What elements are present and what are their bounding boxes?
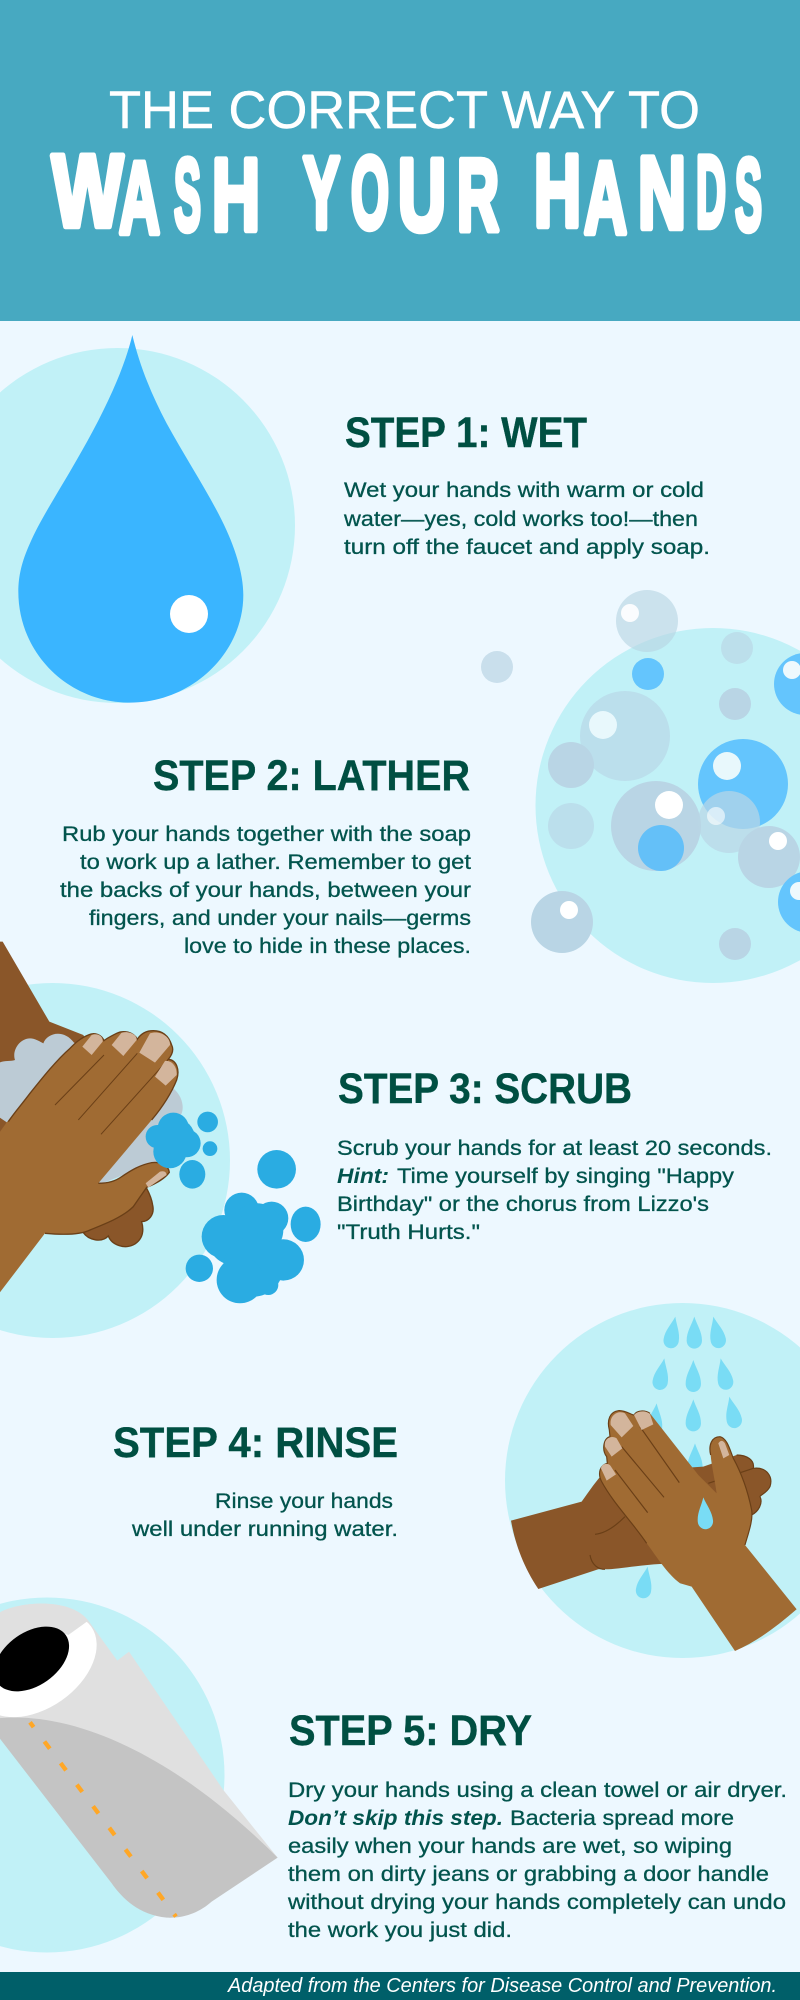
step 3 body: Scrub your hands for at least 20 seconds. bbox=[337, 1136, 772, 1160]
step 3 text bbox=[337, 1066, 772, 1244]
title line 2: A bbox=[584, 141, 627, 255]
title line 2: D bbox=[696, 135, 726, 249]
step 2 body: the backs of your hands, between your bbox=[60, 878, 471, 902]
foam bbox=[0, 1034, 183, 1185]
step 2 body: love to hide in these places. bbox=[184, 934, 471, 958]
step 5 body: without drying your hands completely can undo bbox=[287, 1890, 786, 1914]
back hand bbox=[511, 1455, 771, 1589]
step 4 body: well under running water. bbox=[131, 1517, 398, 1541]
footer credit bar: Adapted from the Centers for Disease Control and Prevention. bbox=[227, 1975, 777, 1997]
step 3 body: Hint: bbox=[337, 1164, 389, 1188]
towel sheet bbox=[0, 1718, 278, 1918]
step 3 heading: STEP 3: SCRUB bbox=[338, 1066, 632, 1113]
back arm bbox=[0, 942, 110, 1160]
step 4 body: Rinse your hands bbox=[215, 1489, 393, 1513]
title line 2: N bbox=[638, 136, 686, 250]
title line 2: R bbox=[457, 138, 499, 252]
title line 2: H bbox=[212, 138, 260, 252]
falling water drops bbox=[635, 1315, 743, 1599]
step 1 body bbox=[343, 478, 710, 559]
header banner bbox=[0, 0, 800, 321]
step 4 body bbox=[131, 1489, 398, 1541]
step 2 body: Rub your hands together with the soap bbox=[62, 822, 471, 846]
step 5 body: Bacteria spread more bbox=[510, 1806, 734, 1830]
step 3 body: Birthday" or the chorus from Lizzo's bbox=[337, 1192, 709, 1216]
step 2 body: to work up a lather. Remember to get bbox=[80, 850, 471, 874]
step 5 body: Don’t skip this step. bbox=[288, 1806, 503, 1830]
step 5 text bbox=[287, 1708, 787, 1942]
illustration: soap bubbles bbox=[481, 590, 800, 983]
back fingers bbox=[83, 1188, 153, 1247]
step 1 heading: STEP 1: WET bbox=[345, 410, 587, 457]
illustration: water drop bbox=[0, 335, 295, 703]
step 1 body: turn off the faucet and apply soap. bbox=[344, 535, 710, 559]
step 4 heading: STEP 4: RINSE bbox=[113, 1420, 398, 1467]
light paper bbox=[0, 1604, 278, 1858]
drop on hand bbox=[696, 1497, 714, 1530]
step 3 body: Time yourself by singing "Happy bbox=[397, 1164, 734, 1188]
title line 2: W bbox=[52, 134, 124, 248]
title line 2: H bbox=[534, 134, 581, 248]
step 3 body bbox=[337, 1136, 772, 1244]
illustration: paper towel roll bbox=[0, 1591, 278, 1952]
step 1 text bbox=[343, 410, 710, 559]
soap splats bbox=[146, 1112, 321, 1303]
title line 1: THE CORRECT WAY TO bbox=[109, 81, 700, 140]
front hand bbox=[0, 1031, 178, 1297]
title line 2: Y bbox=[303, 136, 340, 250]
step 2 heading: STEP 2: LATHER bbox=[153, 753, 470, 800]
step 5 body: easily when your hands are wet, so wiping bbox=[288, 1834, 732, 1858]
front hand bbox=[600, 1411, 797, 1651]
step 5 body bbox=[287, 1778, 787, 1942]
title line 2: S bbox=[174, 138, 201, 252]
step 5 body: them on dirty jeans or grabbing a door handle bbox=[288, 1862, 769, 1886]
step 5 heading: STEP 5: DRY bbox=[289, 1708, 532, 1755]
step 5 body: the work you just did. bbox=[288, 1918, 512, 1942]
step 3 body: "Truth Hurts." bbox=[337, 1220, 480, 1244]
footer credit bar bbox=[0, 1972, 800, 2000]
step 2 text bbox=[60, 753, 471, 958]
step 1 body: Wet your hands with warm or cold bbox=[344, 478, 704, 502]
illustration: scrubbing hands bbox=[0, 942, 321, 1338]
roll end bbox=[0, 1591, 116, 1739]
step 2 body bbox=[60, 822, 471, 958]
title line 2: O bbox=[351, 136, 389, 250]
title line 2: U bbox=[398, 138, 446, 252]
title line 2: A bbox=[119, 141, 160, 255]
illustration: rinsing hands bbox=[505, 1303, 800, 1658]
step 5 body: Dry your hands using a clean towel or air dryer. bbox=[288, 1778, 787, 1802]
step 2 body: fingers, and under your nails—germs bbox=[89, 906, 471, 930]
step 4 text bbox=[113, 1420, 398, 1541]
perforation line bbox=[30, 1722, 176, 1917]
step 1 body: water—yes, cold works too!—then bbox=[343, 507, 698, 531]
